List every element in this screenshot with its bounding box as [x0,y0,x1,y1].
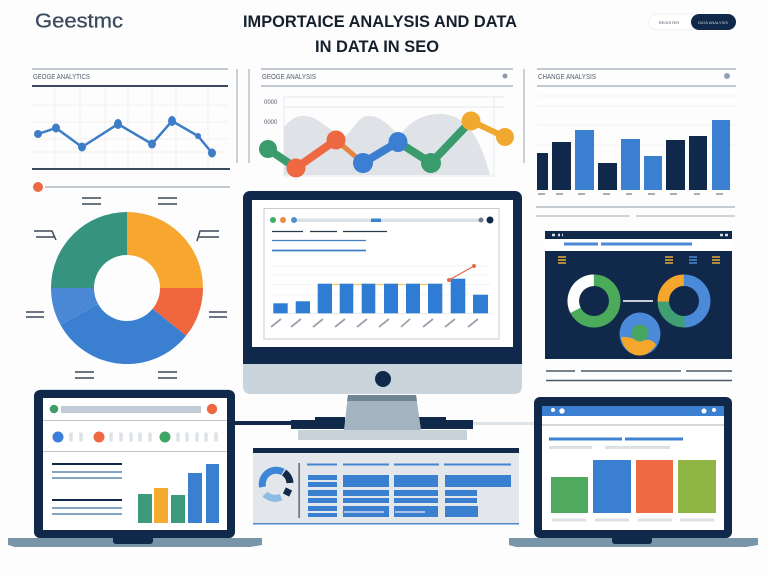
laptop text lines [52,464,122,500]
browser header [542,406,724,416]
laptop bar chart [138,464,219,523]
dashboard pie [620,312,660,356]
panel: line chart: GEOGE ANALYTICS [33,74,90,81]
panel: line chart [32,68,230,170]
monitor [243,191,522,394]
panel: multicolour line chart [259,68,514,178]
header buttons: DATA ANALYSIS [698,20,728,25]
monitor text lines [272,230,387,232]
panel: bar chart [536,68,736,216]
title: IMPORTAICE ANALYSIS AND DATA [243,13,517,31]
dashboard donut left [566,273,622,329]
cables [235,421,536,425]
panel: donut chart [26,182,230,390]
logo: Geestmc [35,10,123,32]
panel: bar chart: CHANGE ANALYSIS [538,74,596,81]
laptop toolbar [50,404,217,414]
dashboard donut right [663,280,705,322]
power button [375,371,391,387]
laptop bar chart [551,460,716,513]
laptop: left [8,390,262,547]
dashboard icons [558,257,720,263]
monitor stand [291,395,473,440]
panel: multicolour line chart: 0000 [264,100,278,106]
dividers [237,69,524,163]
laptop indicators [52,432,216,442]
panel: dark dashboard [545,231,732,380]
monitor bar chart [271,264,491,327]
laptop: right [509,397,758,547]
header buttons [649,14,736,30]
panel: data table [253,448,519,524]
header buttons: REGISTER [659,20,679,25]
panel: multicolour line chart: 0000 [264,120,278,126]
title: IN DATA IN SEO [315,38,439,56]
table donut [262,470,290,498]
title [243,13,517,56]
monitor toolbar [270,216,494,224]
panel: multicolour line chart: GEOGE ANALYSIS [262,74,316,81]
